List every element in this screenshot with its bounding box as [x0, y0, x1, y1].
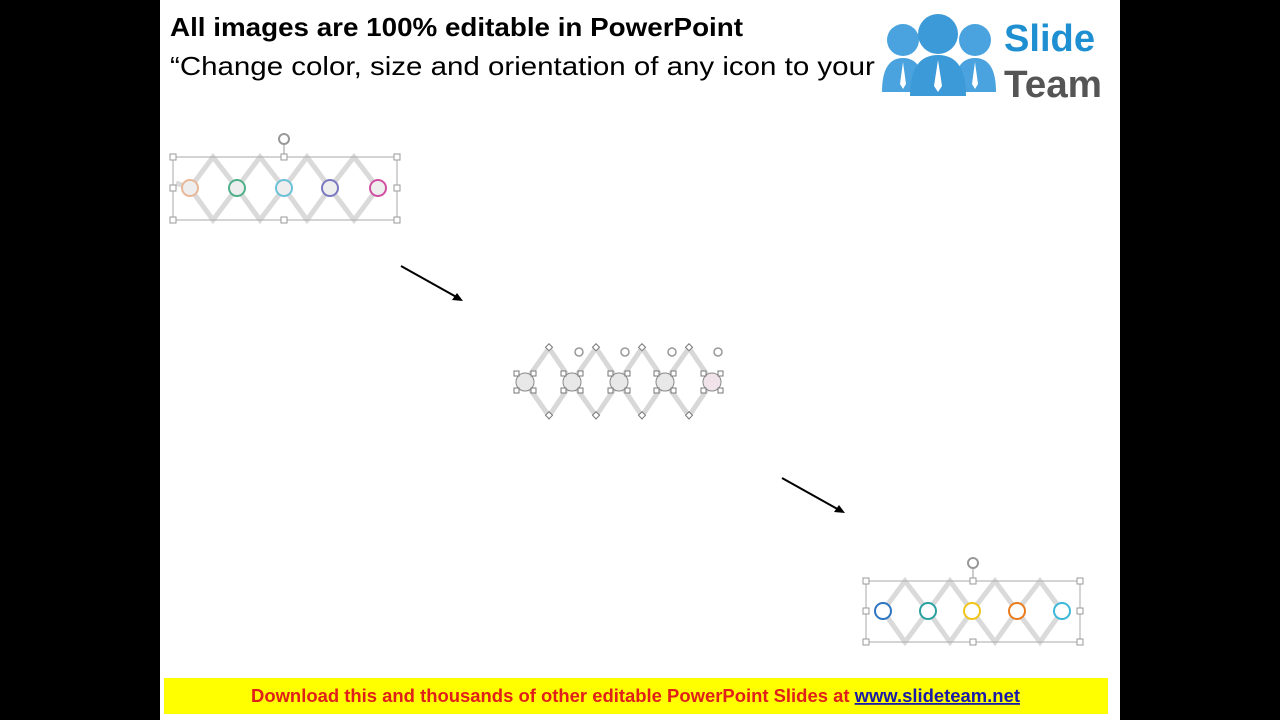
- diagram: middle (ungrouped): [514, 344, 723, 419]
- logo: SlideTeam: [878, 8, 1108, 106]
- logo: SlideTeam: Slide: [1004, 18, 1095, 60]
- logo: SlideTeam: Team: [1004, 64, 1102, 106]
- arrow 1: [401, 266, 463, 301]
- diagram: top (original): [170, 134, 400, 223]
- title: All images are 100% editable in PowerPoint: [170, 12, 743, 42]
- footer banner: [164, 678, 1108, 714]
- slide: [160, 0, 1120, 720]
- title: “Change color, size and orientation of any icon to your liking”: [170, 51, 960, 81]
- diagram: bottom (recolored): [863, 558, 1083, 645]
- arrow 2: [782, 478, 845, 513]
- footer banner: Download this and thousands of other editable PowerPoint Slides at www.slideteam.net: [251, 686, 1020, 706]
- title: [170, 12, 960, 81]
